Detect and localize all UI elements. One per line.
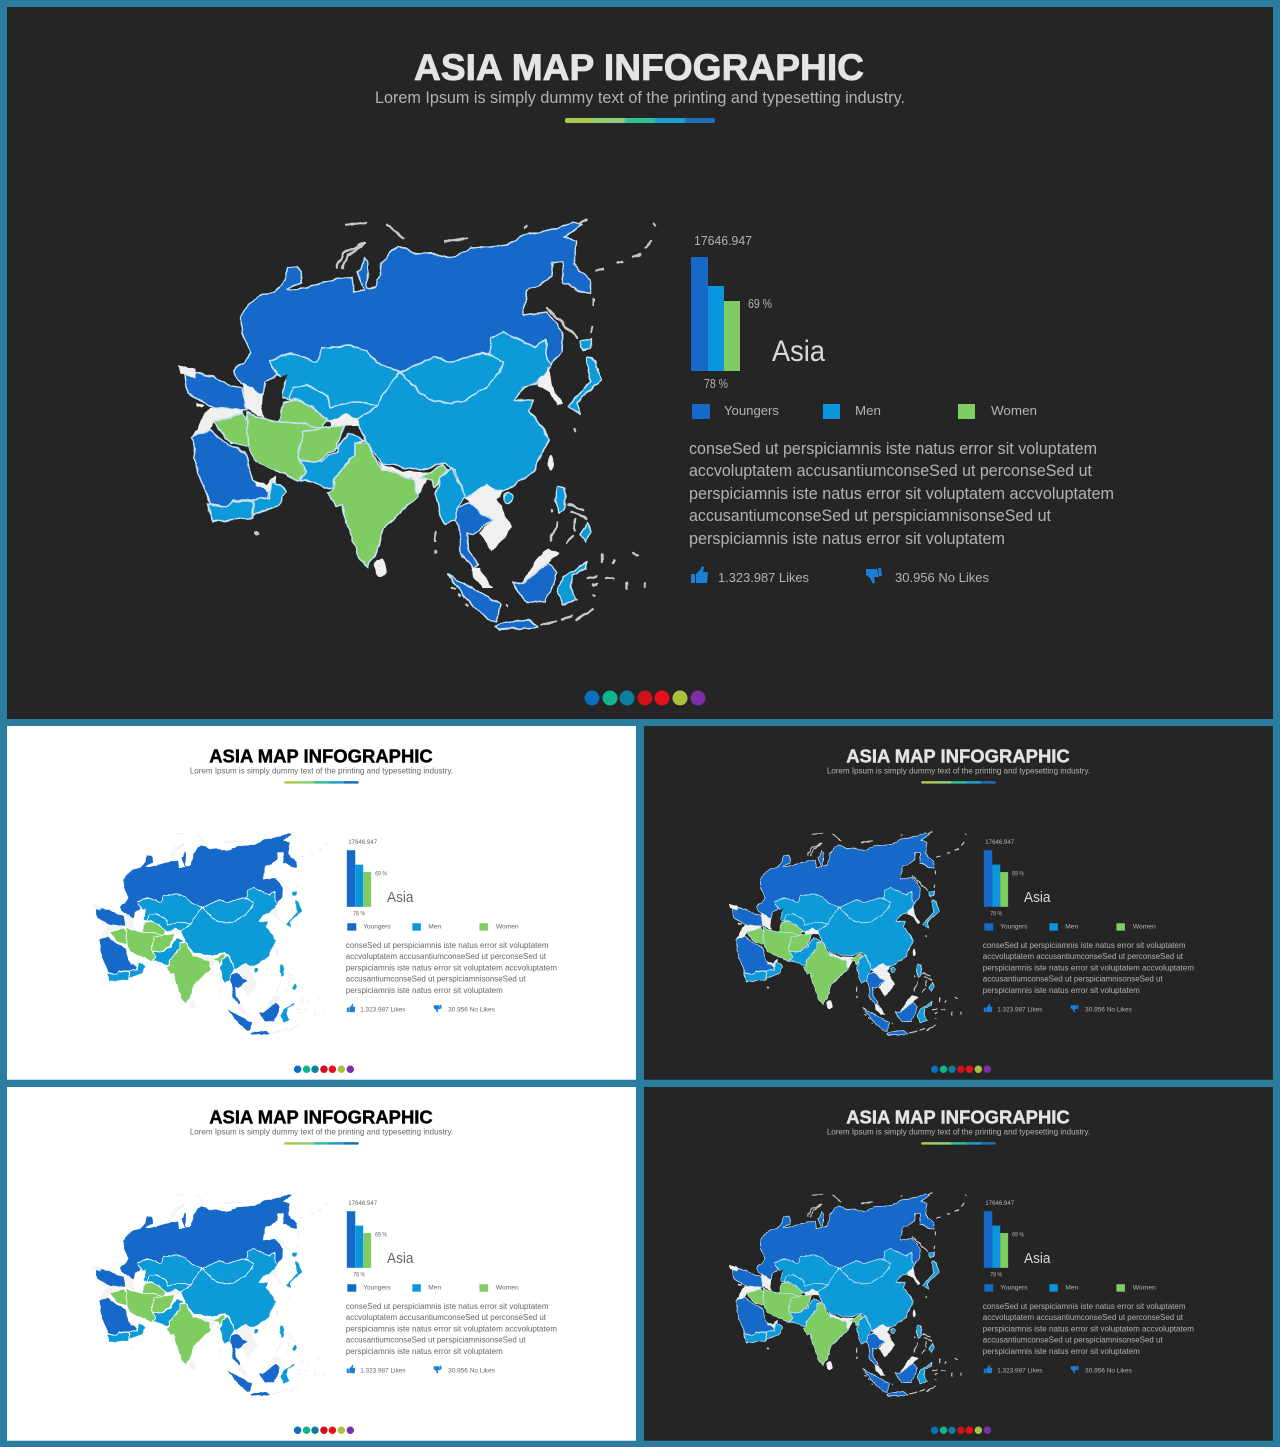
bar chart: 69 % bbox=[375, 1232, 387, 1239]
region: Caspian Sea bbox=[262, 375, 287, 420]
legend: Men bbox=[855, 404, 881, 418]
body paragraph: accvoluptatem accusantiumconseSed ut perconseSed ut bbox=[983, 952, 1184, 961]
bar chart: 17646.947 bbox=[985, 1200, 1015, 1207]
subtitle: Lorem Ipsum is simply dummy text of the printing and typesetting industry. bbox=[827, 1127, 1090, 1137]
region: Palawan bbox=[550, 523, 558, 540]
likes count: 1.323.987 Likes bbox=[997, 1007, 1042, 1014]
region: North-east India bbox=[420, 465, 447, 487]
body paragraph: perspiciamnis iste natus error sit voluptatem bbox=[346, 1347, 503, 1356]
icon: thumbs down bbox=[434, 1005, 442, 1013]
gradient underline bbox=[284, 1142, 359, 1145]
region: Afghanistan bbox=[298, 425, 345, 462]
bar chart bbox=[347, 839, 387, 917]
body paragraph bbox=[983, 1302, 1194, 1356]
region: Turkish Thrace bbox=[178, 365, 195, 378]
region: Korea bbox=[538, 367, 562, 405]
legend: Youngers bbox=[363, 1285, 391, 1292]
region: Iraq bbox=[213, 412, 248, 447]
no-likes count: 30.956 No Likes bbox=[1085, 1007, 1132, 1014]
title: ASIA MAP INFOGRAPHIC bbox=[414, 47, 864, 88]
panel: light slide bottom left bbox=[7, 1087, 636, 1441]
map of Asia bbox=[92, 832, 328, 1036]
bar chart: 78 % bbox=[353, 910, 366, 917]
region: Sri Lanka bbox=[374, 559, 386, 577]
region: Saudi Arabia bbox=[192, 430, 270, 507]
pagination dots bbox=[294, 1427, 354, 1434]
legend: Youngers bbox=[1000, 924, 1028, 931]
body paragraph: accvoluptatem accusantiumconseSed ut perconseSed ut bbox=[346, 952, 547, 961]
subtitle: Lorem Ipsum is simply dummy text of the printing and typesetting industry. bbox=[375, 88, 905, 107]
bar chart: 17646.947 bbox=[348, 839, 378, 846]
title: ASIA MAP INFOGRAPHIC bbox=[846, 1106, 1070, 1127]
legend: Men bbox=[1065, 1285, 1079, 1292]
region: Iran and Turkmenistan bbox=[247, 400, 327, 480]
no-likes count: 30.956 No Likes bbox=[448, 1007, 495, 1014]
region: Kuril and northern Pacific islands bbox=[580, 220, 654, 332]
body paragraph: accvoluptatem accusantiumconseSed ut perconseSed ut bbox=[689, 462, 1092, 480]
panel: dark slide top right bbox=[644, 726, 1273, 1080]
region: Oman bbox=[253, 480, 287, 515]
bar chart: 78 % bbox=[990, 910, 1003, 917]
body paragraph: accusantiumconseSed ut perspiciamnisonseSed ut bbox=[346, 1335, 526, 1344]
body paragraph: accusantiumconseSed ut perspiciamnisonseSed ut bbox=[983, 1335, 1163, 1344]
body paragraph: accvoluptatem accusantiumconseSed ut perconseSed ut bbox=[346, 1313, 547, 1322]
icon: thumbs up bbox=[691, 566, 708, 583]
body paragraph: conseSed ut perspiciamnis iste natus error sit voluptatem bbox=[983, 941, 1186, 950]
body paragraph: conseSed ut perspiciamnis iste natus error sit voluptatem bbox=[689, 440, 1097, 458]
body paragraph: perspiciamnis iste natus error sit voluptatem bbox=[983, 1347, 1140, 1356]
icon: thumbs up bbox=[347, 1365, 355, 1373]
region: Mongolia bbox=[400, 353, 503, 402]
no-likes count: 30.956 No Likes bbox=[895, 571, 989, 585]
region: Persian Gulf bbox=[246, 447, 277, 478]
map of Asia bbox=[729, 832, 965, 1036]
region: Pakistan bbox=[300, 433, 365, 488]
map of Asia bbox=[178, 220, 654, 630]
region: Sumatra bbox=[448, 575, 500, 622]
region: Japan bbox=[568, 338, 602, 413]
icon: thumbs up bbox=[347, 1004, 355, 1012]
subtitle: Lorem Ipsum is simply dummy text of the printing and typesetting industry. bbox=[827, 766, 1090, 776]
region: Thailand bbox=[455, 503, 492, 568]
region: Socotra bbox=[254, 531, 260, 535]
legend: Youngers bbox=[724, 404, 779, 418]
pagination dots bbox=[294, 1066, 354, 1073]
region: Taiwan bbox=[548, 455, 554, 471]
body paragraph: perspiciamnis iste natus error sit voluptatem accvoluptatem bbox=[983, 1324, 1194, 1333]
likes count: 1.323.987 Likes bbox=[360, 1368, 405, 1375]
region: Hainan bbox=[503, 493, 513, 503]
body paragraph: perspiciamnis iste natus error sit voluptatem accvoluptatem bbox=[346, 1324, 557, 1333]
region: Sarawak bbox=[523, 548, 560, 582]
gradient underline bbox=[565, 118, 715, 123]
region: Uzbekistan and neighbours bbox=[290, 385, 378, 422]
body paragraph: perspiciamnis iste natus error sit voluptatem accvoluptatem bbox=[983, 963, 1194, 972]
body paragraph bbox=[346, 1302, 557, 1356]
region: Caucasus and Levant bbox=[192, 382, 264, 437]
pagination dots bbox=[931, 1066, 991, 1073]
legend: Women bbox=[1133, 924, 1156, 931]
body paragraph: perspiciamnis iste natus error sit voluptatem accvoluptatem bbox=[346, 963, 557, 972]
legend bbox=[984, 1284, 1156, 1292]
title: ASIA MAP INFOGRAPHIC bbox=[209, 1106, 433, 1127]
region: Borneo bbox=[513, 563, 557, 602]
region name: Asia bbox=[772, 335, 825, 368]
region: Himalaya white strip bbox=[378, 461, 432, 497]
bar chart: 17646.947 bbox=[985, 839, 1015, 846]
region: Arctic islands bbox=[337, 223, 527, 268]
body paragraph bbox=[346, 941, 557, 995]
body paragraph: accusantiumconseSed ut perspiciamnisonseSed ut bbox=[983, 974, 1163, 983]
region name: Asia bbox=[1024, 1251, 1051, 1267]
region: Sulawesi bbox=[558, 562, 587, 605]
legend: Women bbox=[991, 404, 1037, 418]
legend: Men bbox=[428, 1285, 442, 1292]
bar chart bbox=[691, 234, 772, 391]
legend bbox=[692, 404, 1037, 419]
percent label: 69 % bbox=[748, 297, 772, 311]
bar: Women bbox=[724, 301, 740, 371]
region: small Philippine islands bbox=[567, 505, 586, 543]
region name: Asia bbox=[387, 1251, 414, 1267]
bar chart: 78 % bbox=[353, 1271, 366, 1278]
bar chart bbox=[347, 1200, 387, 1278]
region: Myanmar bbox=[435, 467, 465, 525]
body paragraph: conseSed ut perspiciamnis iste natus error sit voluptatem bbox=[346, 941, 549, 950]
body paragraph: conseSed ut perspiciamnis iste natus error sit voluptatem bbox=[983, 1302, 1186, 1311]
icon: thumbs down bbox=[866, 568, 882, 584]
panel: light slide top left bbox=[7, 726, 636, 1080]
body paragraph bbox=[689, 440, 1114, 548]
region: Russia bbox=[233, 222, 592, 395]
bar chart bbox=[984, 1200, 1024, 1278]
region: China bbox=[357, 333, 552, 497]
pagination dots bbox=[931, 1427, 991, 1434]
bar chart: 69 % bbox=[375, 871, 387, 878]
no-likes count: 30.956 No Likes bbox=[448, 1368, 495, 1375]
subtitle: Lorem Ipsum is simply dummy text of the printing and typesetting industry. bbox=[190, 766, 453, 776]
legend bbox=[347, 923, 519, 931]
likes count: 1.323.987 Likes bbox=[718, 571, 809, 585]
title: ASIA MAP INFOGRAPHIC bbox=[209, 745, 433, 766]
legend bbox=[984, 923, 1156, 931]
map of Asia bbox=[729, 1193, 965, 1397]
bar: Youngers bbox=[691, 257, 708, 371]
body paragraph: accusantiumconseSed ut perspiciamnisonseSed ut bbox=[689, 507, 1051, 525]
icon: thumbs up bbox=[984, 1365, 992, 1373]
region: Yemen bbox=[208, 501, 253, 522]
region: Malay peninsula bbox=[472, 567, 492, 588]
bar chart: 78 % bbox=[990, 1271, 1003, 1278]
percent label: 78 % bbox=[704, 377, 728, 391]
panel: main dark slide bbox=[7, 7, 1273, 719]
legend: Women bbox=[496, 924, 519, 931]
border: Iran-Turkmenistan bbox=[278, 422, 322, 428]
region: Sakhalin bbox=[547, 308, 577, 338]
likes count: 1.323.987 Likes bbox=[997, 1368, 1042, 1375]
legend: Youngers bbox=[1000, 1285, 1028, 1292]
region: Turkey bbox=[185, 373, 247, 410]
body paragraph: perspiciamnis iste natus error sit voluptatem bbox=[689, 530, 1005, 548]
icon: thumbs down bbox=[1071, 1366, 1079, 1374]
icon: thumbs down bbox=[1071, 1005, 1079, 1013]
legend: Men bbox=[428, 924, 442, 931]
region: Java bbox=[495, 620, 537, 630]
body paragraph: accvoluptatem accusantiumconseSed ut perconseSed ut bbox=[983, 1313, 1184, 1322]
body paragraph: perspiciamnis iste natus error sit voluptatem bbox=[983, 986, 1140, 995]
region: Philippines bbox=[555, 487, 592, 542]
gradient underline bbox=[921, 781, 996, 784]
legend bbox=[347, 1284, 519, 1292]
no-likes count: 30.956 No Likes bbox=[1085, 1368, 1132, 1375]
body paragraph: perspiciamnis iste natus error sit voluptatem bbox=[346, 986, 503, 995]
pagination dots bbox=[584, 690, 706, 706]
body paragraph: perspiciamnis iste natus error sit voluptatem accvoluptatem bbox=[689, 485, 1114, 503]
subtitle: Lorem Ipsum is simply dummy text of the printing and typesetting industry. bbox=[190, 1127, 453, 1137]
legend: Women bbox=[496, 1285, 519, 1292]
body paragraph bbox=[983, 941, 1194, 995]
region: Indonesian small islands bbox=[452, 430, 645, 625]
region: Indochina bbox=[465, 485, 512, 552]
panel: dark slide bottom right bbox=[644, 1087, 1273, 1441]
body paragraph: accusantiumconseSed ut perspiciamnisonseSed ut bbox=[346, 974, 526, 983]
icon: thumbs up bbox=[984, 1004, 992, 1012]
region: Andaman islands bbox=[435, 532, 436, 553]
region: Gulf states bbox=[255, 475, 277, 491]
legend: Women bbox=[1133, 1285, 1156, 1292]
bar chart: 17646.947 bbox=[348, 1200, 378, 1207]
gradient underline bbox=[921, 1142, 996, 1145]
bar chart: 69 % bbox=[1012, 871, 1024, 878]
region: Kazakhstan bbox=[270, 345, 400, 407]
bar: Men bbox=[708, 286, 724, 371]
map of Asia bbox=[92, 1193, 328, 1397]
legend: Men bbox=[1065, 924, 1079, 931]
likes count: 1.323.987 Likes bbox=[360, 1007, 405, 1014]
region name: Asia bbox=[1024, 890, 1051, 906]
region: India bbox=[328, 442, 417, 567]
gradient underline bbox=[284, 781, 359, 784]
icon: thumbs down bbox=[434, 1366, 442, 1374]
title: ASIA MAP INFOGRAPHIC bbox=[846, 745, 1070, 766]
bar chart: 69 % bbox=[1012, 1232, 1024, 1239]
value label: 17646.947 bbox=[694, 234, 752, 248]
bar chart bbox=[984, 839, 1024, 917]
region: white Tajik patch bbox=[330, 414, 359, 434]
body paragraph: conseSed ut perspiciamnis iste natus error sit voluptatem bbox=[346, 1302, 549, 1311]
region name: Asia bbox=[387, 890, 414, 906]
legend: Youngers bbox=[363, 924, 391, 931]
